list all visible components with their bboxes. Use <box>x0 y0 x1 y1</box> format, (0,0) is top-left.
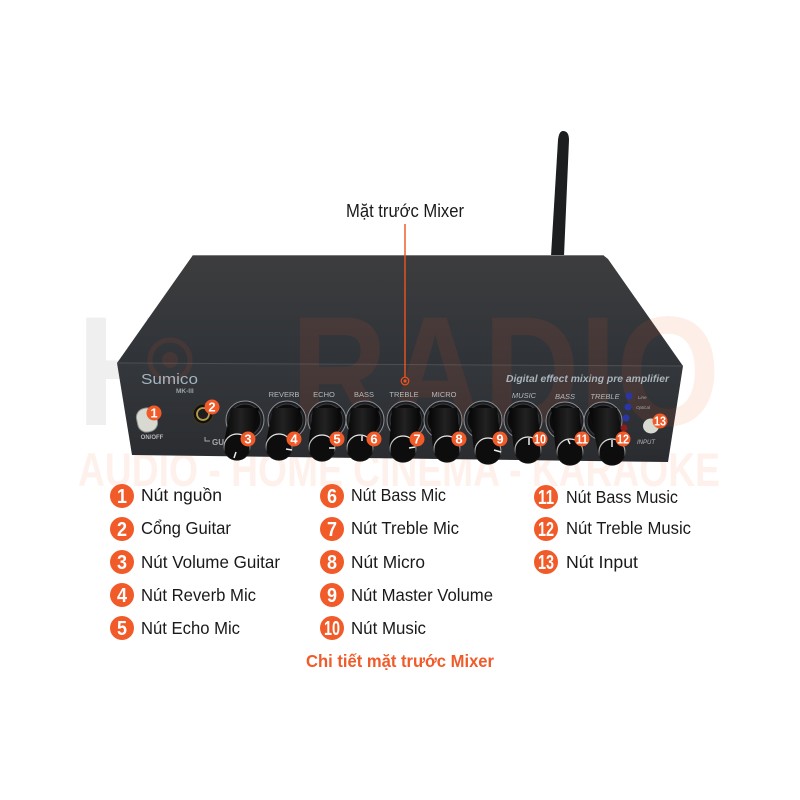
legend item 11 <box>534 485 678 509</box>
top ledge highlight <box>193 254 603 256</box>
legend item 4: Nút Reverb Mic <box>141 585 256 605</box>
callout leader line <box>401 224 409 385</box>
knob 10 <box>504 401 542 463</box>
device markers: 6 <box>370 432 378 446</box>
watermark: HD RADIO: HD <box>77 285 275 459</box>
legend item 8: Nút Micro <box>351 552 425 572</box>
control labels: TREBLE <box>590 392 621 401</box>
knob 4 <box>265 401 306 460</box>
control labels: TREBLE <box>389 390 419 399</box>
legend item 1 <box>110 484 222 508</box>
legend item 6 <box>320 484 446 508</box>
legend item 8: 8 <box>327 552 337 574</box>
control labels: BASS <box>555 392 575 401</box>
legend item 10: 10 <box>324 618 340 640</box>
device markers: 2 <box>208 400 216 414</box>
device markers: 8 <box>455 432 463 446</box>
caption: Chi tiết mặt trước Mixer <box>306 651 494 671</box>
legend item 3: Nút Volume Guitar <box>141 552 280 572</box>
legend item 9: 9 <box>327 585 337 607</box>
guitar jack: GUI <box>212 438 226 447</box>
input button <box>637 418 659 446</box>
legend column 2 <box>320 484 493 640</box>
legend column 3 <box>534 485 691 574</box>
legend item 6: 6 <box>327 486 337 508</box>
knob 11 <box>546 402 584 465</box>
legend item 2: 2 <box>117 519 127 541</box>
icon: antenna <box>551 131 569 256</box>
legend item 3: 3 <box>117 552 127 574</box>
input button: INPUT <box>637 440 656 446</box>
legend item 8 <box>320 550 425 574</box>
control labels: MUSIC <box>512 391 537 400</box>
legend item 5: 5 <box>117 618 127 640</box>
legend item 5: Nút Echo Mic <box>141 618 240 638</box>
legend item 2: Cổng Guitar <box>141 518 231 538</box>
device markers: 11 <box>576 432 588 446</box>
legend item 13 <box>534 550 638 574</box>
device markers: 1 <box>150 406 158 420</box>
legend item 11: 11 <box>538 487 554 509</box>
guitar jack <box>193 404 226 447</box>
watermark: HD RADIO: RADIO <box>291 285 720 459</box>
watermark showing through device <box>148 318 676 426</box>
control labels: ECHO <box>313 390 335 399</box>
input LEDs: Line <box>638 395 647 400</box>
device markers: 7 <box>413 432 421 446</box>
input LEDs: Optical <box>636 405 651 410</box>
brand: Sumico: MK-III <box>176 388 194 395</box>
mixer device <box>117 255 720 465</box>
knob 5 <box>308 401 346 461</box>
watermark showing through device: RADIO <box>291 285 720 459</box>
power button <box>135 406 164 441</box>
power button: ON/OFF <box>141 435 164 441</box>
device markers: 10 <box>534 432 546 446</box>
device markers: 13 <box>654 414 666 428</box>
legend item 4 <box>110 583 256 607</box>
legend item 6: Nút Bass Mic <box>351 485 446 505</box>
legend item 5 <box>110 616 240 640</box>
device markers: 12 <box>617 432 629 446</box>
legend item 4: 4 <box>117 585 128 607</box>
legend item 1: Nút nguồn <box>141 485 222 505</box>
front panel <box>117 363 683 462</box>
device markers: 9 <box>496 432 504 446</box>
legend item 1: 1 <box>117 486 127 508</box>
input LEDs <box>620 392 651 432</box>
model description: Digital effect mixing pre amplifier <box>506 373 670 385</box>
device markers <box>146 400 668 446</box>
legend item 12: 12 <box>538 519 554 541</box>
device markers: 3 <box>244 432 252 446</box>
knob 12 <box>584 402 626 465</box>
legend item 11: Nút Bass Music <box>566 487 678 507</box>
device markers: 5 <box>333 432 341 446</box>
knob 7 <box>387 401 425 462</box>
top panel <box>117 255 683 366</box>
device markers: 4 <box>290 432 298 446</box>
knob 6 <box>346 401 384 461</box>
legend item 10 <box>320 616 426 640</box>
knob 8 <box>424 401 462 462</box>
legend item 2 <box>110 517 231 541</box>
brand: Sumico: Sumico <box>141 371 198 388</box>
control labels: MICRO <box>432 390 457 399</box>
front edge highlight <box>117 363 683 366</box>
control labels: REVERB <box>269 390 299 399</box>
legend item 12: Nút Treble Music <box>566 518 691 538</box>
control labels: BASS <box>354 390 374 399</box>
legend item 9 <box>320 583 493 607</box>
knob 3 <box>223 401 264 460</box>
watermark: HD RADIO <box>77 285 720 459</box>
knob 9 <box>464 401 502 464</box>
legend item 7: Nút Treble Mic <box>351 518 459 538</box>
legend item 13: 13 <box>538 552 554 574</box>
legend item 7 <box>320 517 459 541</box>
legend item 10: Nút Music <box>351 618 426 638</box>
legend item 12 <box>534 517 691 541</box>
legend item 9: Nút Master Volume <box>351 585 493 605</box>
callout heading: Mặt trước Mixer <box>346 201 464 221</box>
brand: Sumico <box>141 371 198 395</box>
legend item 3 <box>110 550 280 574</box>
control labels <box>269 390 621 401</box>
legend item 13: Nút Input <box>566 552 638 572</box>
legend item 7: 7 <box>327 519 337 541</box>
legend column 1 <box>110 484 280 640</box>
